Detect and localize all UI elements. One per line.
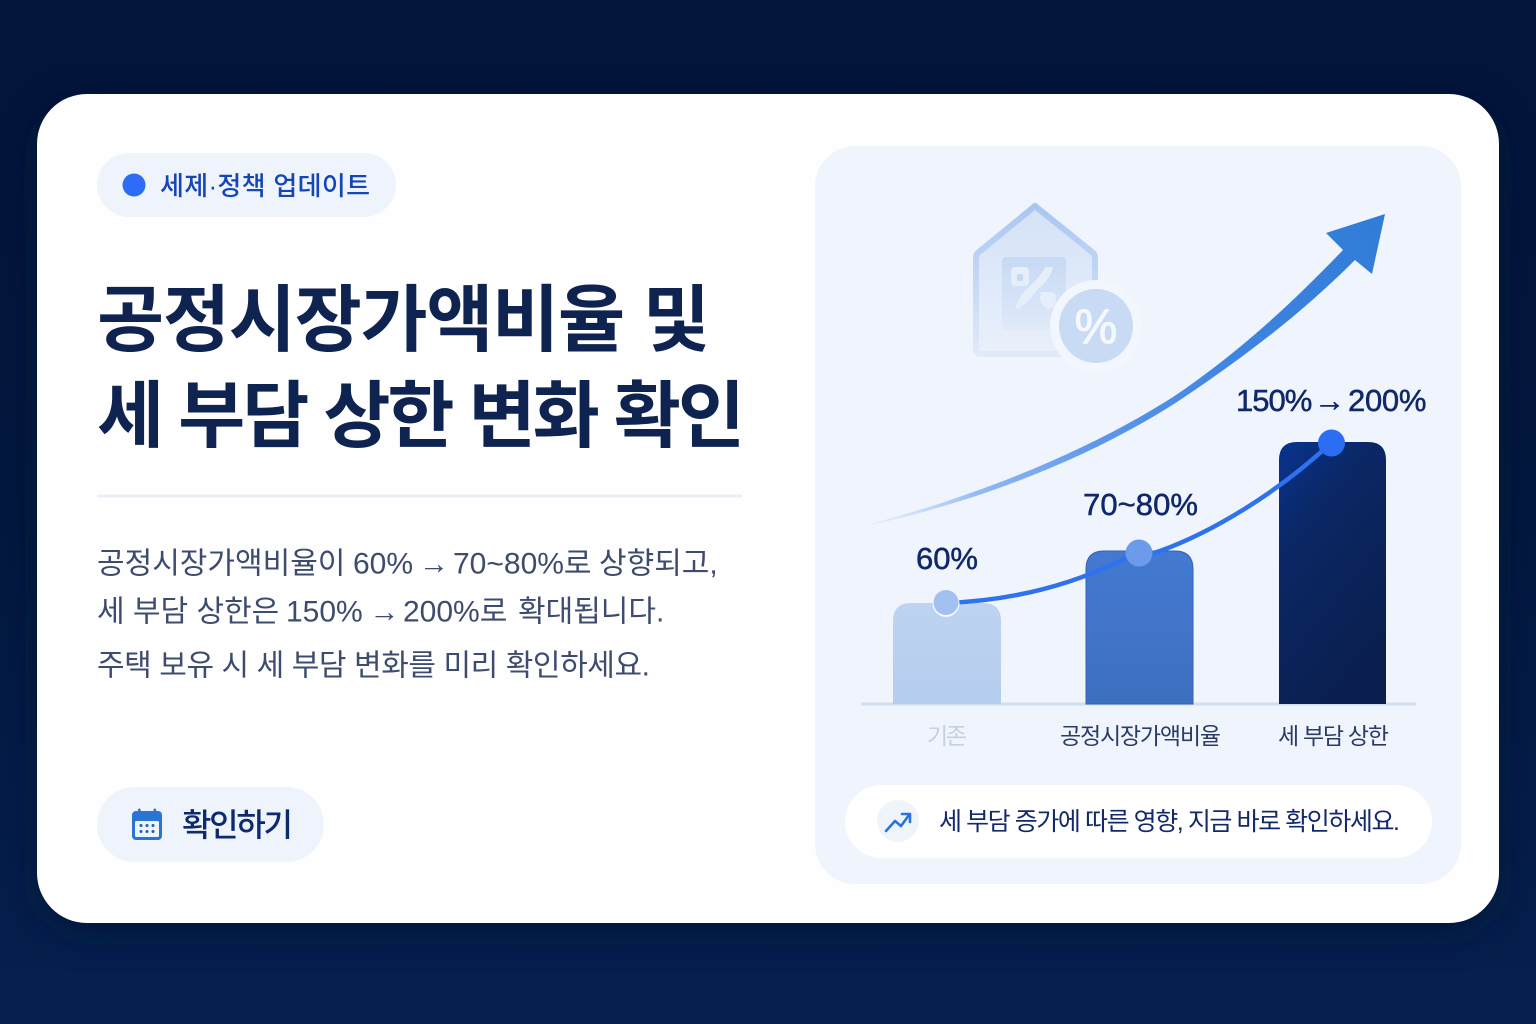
description text: 확대됩니다. [518, 596, 664, 628]
axis line [861, 702, 1416, 706]
value labels: 200% [1348, 383, 1426, 418]
button: confirm: 확인하기 [182, 807, 293, 843]
bar: existing 60% [893, 603, 1001, 704]
description text: 150% [286, 596, 363, 628]
value labels: 70~80% [1083, 487, 1198, 522]
value labels: 60% [916, 541, 978, 576]
description text: 공정시장가액비율이 [97, 548, 345, 580]
icon: house with percent: % [1075, 301, 1117, 354]
value labels [916, 383, 1426, 576]
big growth arrow [870, 214, 1385, 525]
bar: fair market value ratio 70~80% [1086, 551, 1193, 704]
callout pill [845, 785, 1432, 858]
panel: chart [815, 146, 1461, 884]
button: confirm [97, 787, 324, 862]
description text: 세 부담 상한은 [97, 596, 279, 628]
callout pill: 세 부담 증가에 따른 영향, 지금 바로 확인하세요. [939, 808, 1400, 836]
icon: calendar [132, 808, 162, 840]
description text: 주택 보유 시 세 부담 변화를 미리 확인하세요. [97, 650, 650, 682]
axis labels [927, 723, 1389, 749]
description text: 70~80%로 [453, 548, 592, 580]
title: 세 부담 상한 변화 확인 [97, 376, 745, 457]
description text: 60% [353, 548, 413, 580]
trend line [946, 443, 1331, 603]
badge: tax policy update [97, 153, 396, 217]
axis labels: 기존 [927, 723, 967, 749]
description text: 200%로 [403, 596, 507, 628]
trend dots [932, 430, 1345, 617]
value labels: 150% [1236, 383, 1312, 418]
divider [97, 494, 742, 498]
title: 공정시장가액비율 및 [97, 280, 710, 361]
title [97, 280, 745, 457]
main card [37, 94, 1499, 923]
icon: house with percent [976, 206, 1142, 372]
icon: trending up [877, 800, 919, 842]
description text: 상향되고, [599, 548, 718, 580]
axis labels: 공정시장가액비율 [1060, 723, 1221, 749]
bar: tax cap 150% to 200% [1279, 442, 1386, 704]
value labels: → [1314, 383, 1345, 418]
description text: → [370, 596, 400, 628]
axis labels: 세 부담 상한 [1278, 723, 1389, 749]
badge: tax policy update: 세제·정책 업데이트 [160, 171, 370, 201]
description text: → [419, 548, 449, 580]
description text [97, 548, 718, 682]
card shadow [37, 104, 1499, 933]
